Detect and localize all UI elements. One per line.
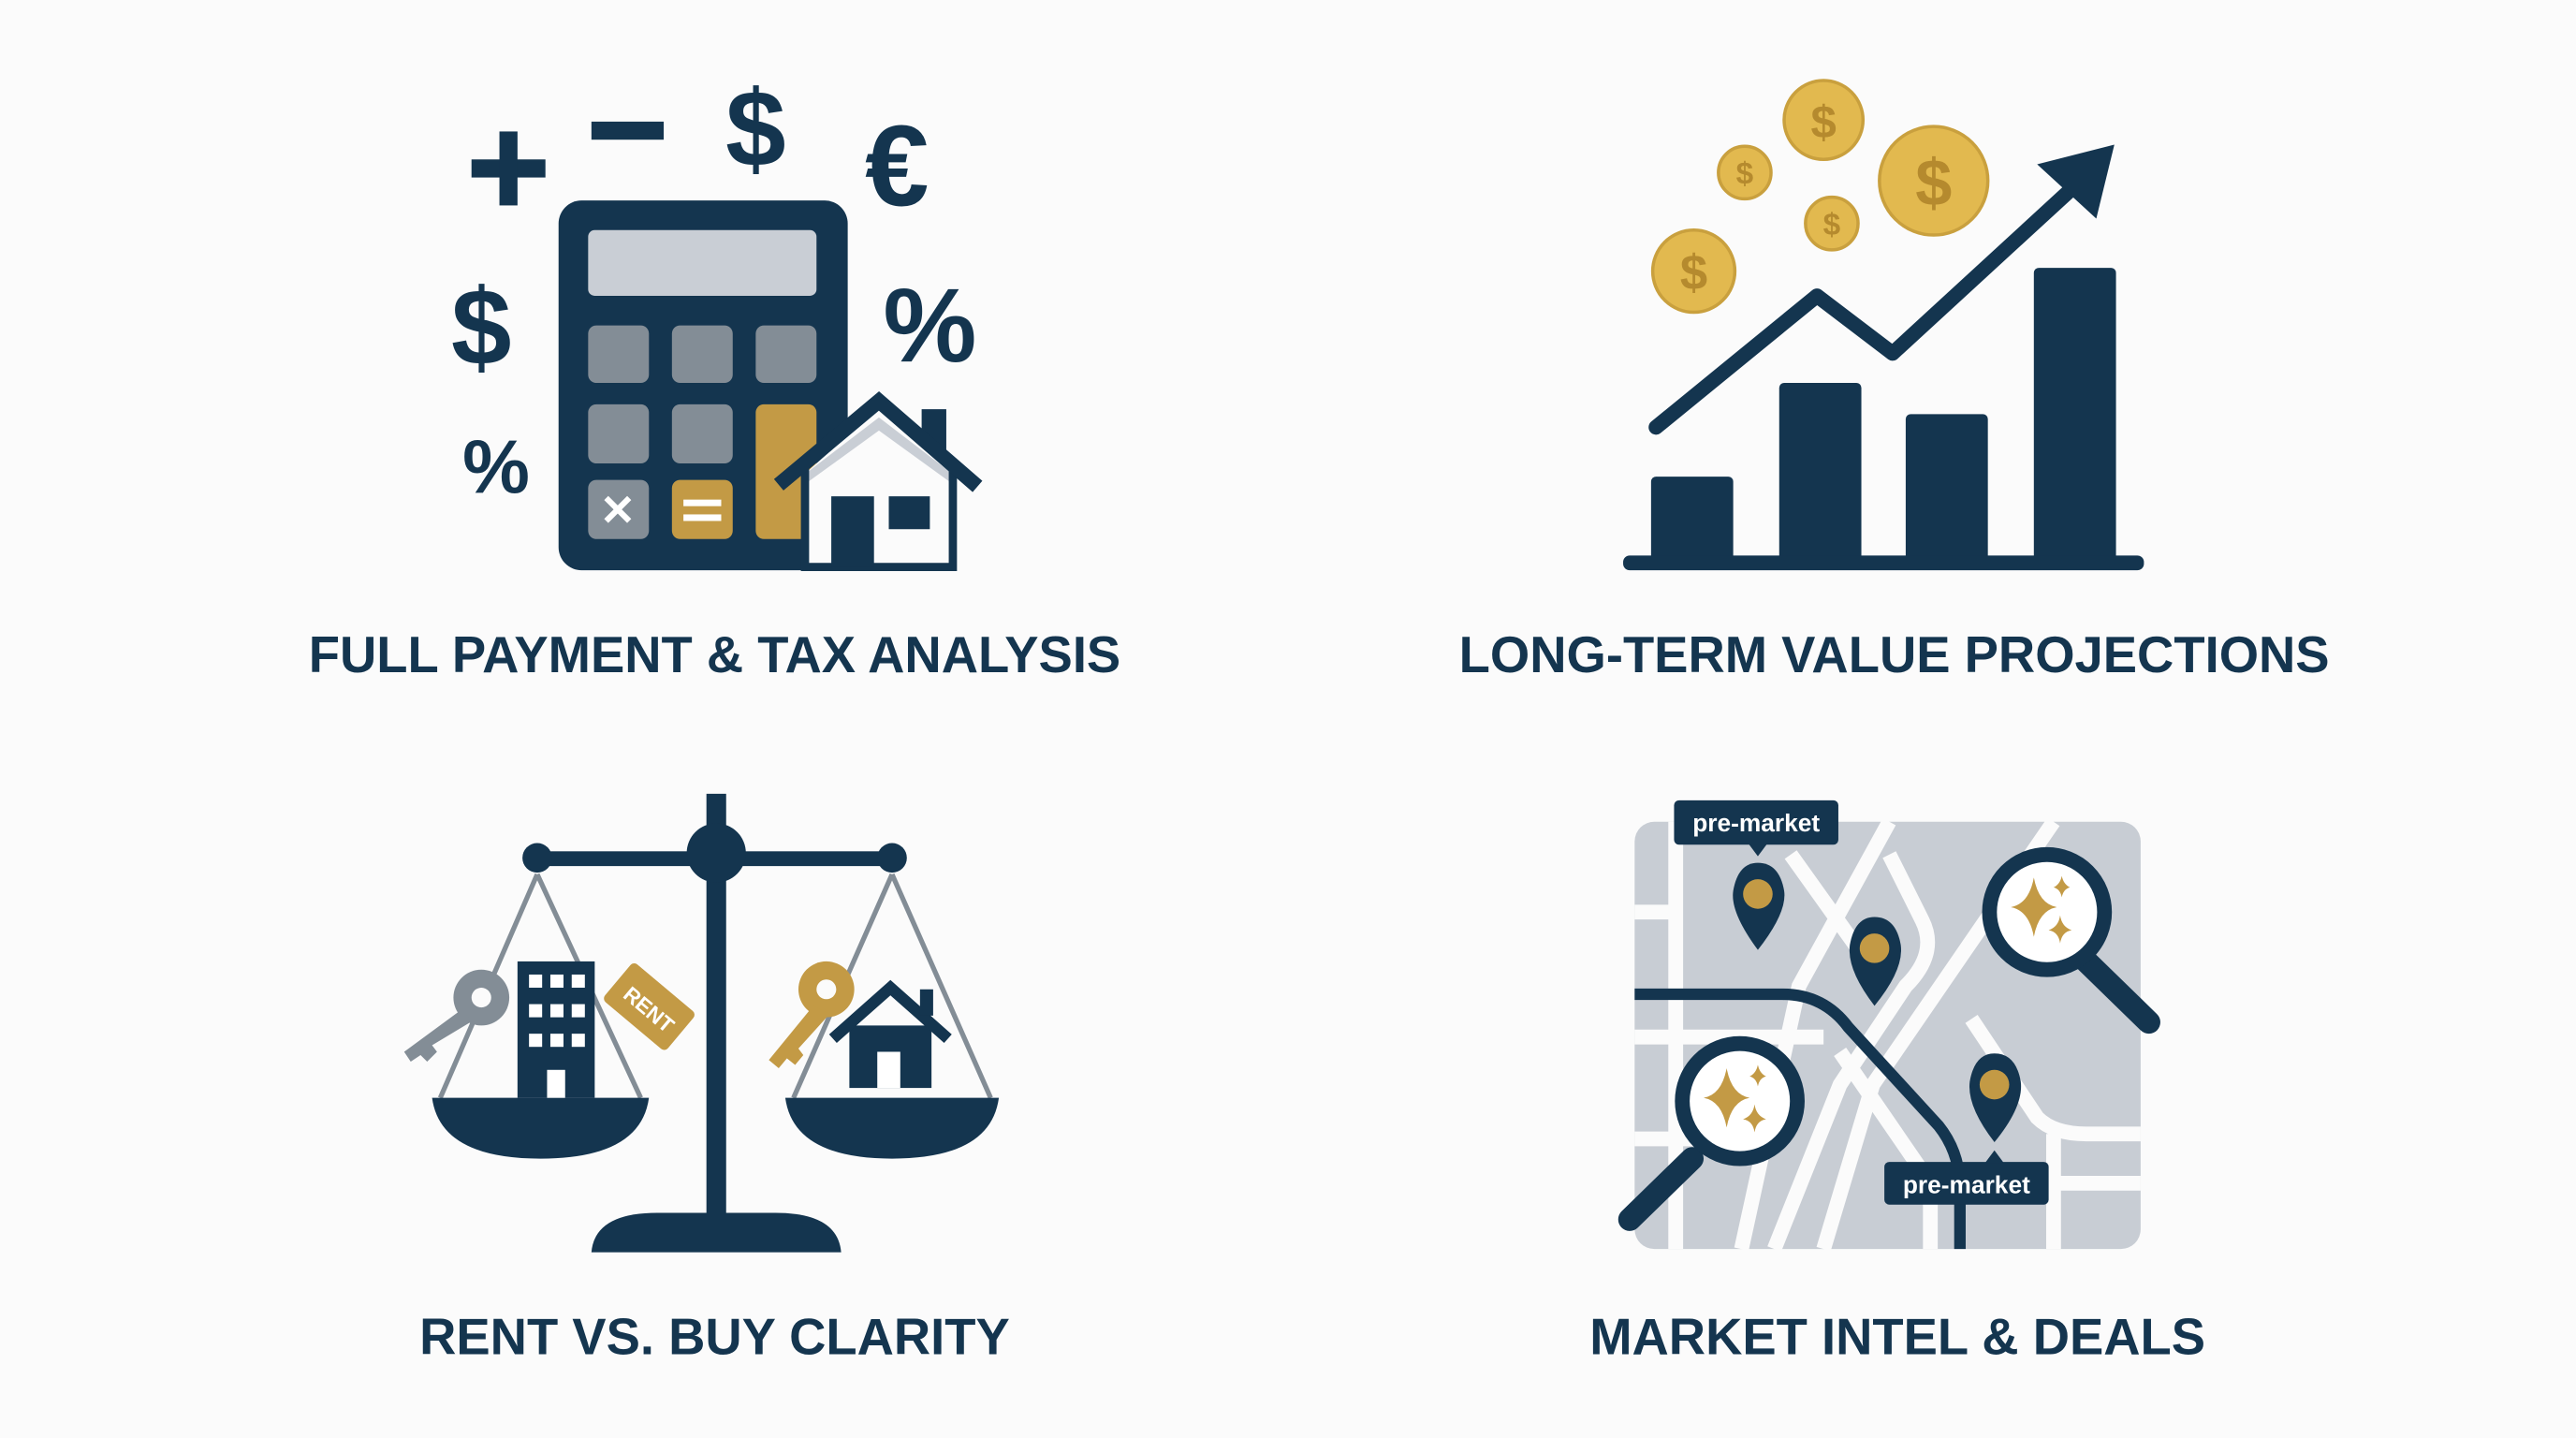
icon: small house xyxy=(833,988,948,1088)
icon: coins: $ xyxy=(1811,97,1837,148)
icon: gold key xyxy=(768,961,855,1068)
heading: rent vs buy: RENT VS. BUY CLARITY xyxy=(419,1308,1010,1365)
icon: house xyxy=(779,401,977,570)
arrow: trend line xyxy=(1656,144,2115,427)
icon: math symbols: € xyxy=(865,102,929,230)
label: pre-market bottom: pre-market xyxy=(1903,1170,2030,1198)
icon: calculator body xyxy=(559,200,848,570)
icon: magnifier bottom left xyxy=(1630,1044,1797,1220)
icon: building xyxy=(518,961,594,1098)
icon: math symbols: % xyxy=(883,266,976,384)
panel: growth chart xyxy=(1623,81,2144,570)
panel: map xyxy=(1630,800,2149,1249)
heading: long-term: LONG-TERM VALUE PROJECTIONS xyxy=(1459,626,2330,683)
heading: full payment: FULL PAYMENT & TAX ANALYSIS xyxy=(309,626,1120,683)
map background xyxy=(1634,822,2141,1249)
icon: math symbols xyxy=(451,67,976,510)
icon: coins: $ xyxy=(1736,157,1754,192)
icon: magnifier top right xyxy=(1989,855,2149,1022)
label: pre-market bottom xyxy=(1884,1151,2049,1205)
icon: strings xyxy=(440,874,990,1098)
icon: rent tag xyxy=(602,961,696,1052)
icon: coins: $ xyxy=(1680,245,1707,301)
label: pre-market top: pre-market xyxy=(1692,809,1820,837)
icon: math symbols: $ xyxy=(451,267,511,389)
icon: coins: $ xyxy=(1823,208,1841,242)
panel: calculator xyxy=(451,67,977,570)
roads xyxy=(1634,822,2141,1249)
icon: scale frame xyxy=(432,794,999,1253)
icon: coins: $ xyxy=(1915,145,1952,219)
icon: pins xyxy=(1733,863,2021,1142)
icon: math symbols: $ xyxy=(725,67,786,189)
heading: market intel: MARKET INTEL & DEALS xyxy=(1589,1308,2205,1365)
panel: scale xyxy=(404,794,999,1253)
icon: gray key xyxy=(404,970,509,1062)
icon: rent tag: RENT xyxy=(619,981,679,1037)
label: pre-market top xyxy=(1674,800,1838,857)
icon: coins xyxy=(1653,81,1988,313)
icon: math symbols: % xyxy=(462,426,530,510)
bar chart xyxy=(1623,268,2144,570)
main road xyxy=(1634,994,1960,1249)
